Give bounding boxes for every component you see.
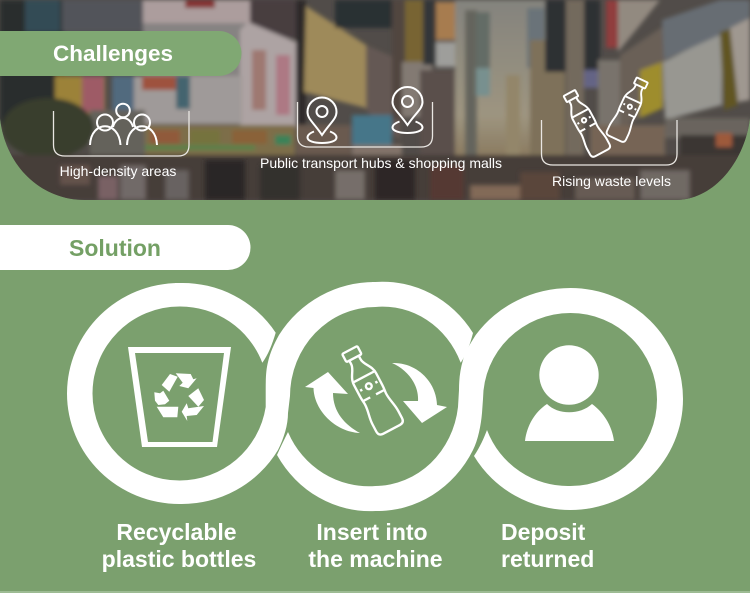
arrow: curved down-right <box>392 363 447 423</box>
icon: bottle with circular arrows <box>305 343 447 436</box>
heading: Solution: Solution <box>69 235 161 261</box>
heading: Challenges: Challenges <box>53 41 173 66</box>
item: rising waste levels <box>542 76 677 189</box>
item: public transport hubs and shopping malls <box>260 87 502 171</box>
label: deposit returned: Deposit <box>501 519 586 545</box>
label: public transport hubs and shopping malls: Public transport hubs & shopping malls <box>260 155 502 171</box>
heading: Solution <box>0 225 250 270</box>
background photo: crowded shopping street <box>0 0 750 200</box>
label: insert into the machine: Insert into <box>316 519 428 545</box>
icon: bottle <box>337 343 404 436</box>
icon: recycling bin <box>128 347 231 447</box>
label: recyclable plastic bottles: Recyclable <box>116 519 237 545</box>
item: high-density areas <box>54 104 189 179</box>
arrow: curved up-left <box>305 372 360 433</box>
icon: two map pins in bracket <box>298 87 432 147</box>
icon: person <box>525 345 614 441</box>
icon: two plastic bottles in bracket <box>542 76 677 165</box>
icon: group of people <box>54 104 189 156</box>
label: high-density areas: High-density areas <box>60 163 176 179</box>
label: insert into the machine: the machine <box>308 546 443 572</box>
interlocking process rings <box>67 282 683 511</box>
label: recyclable plastic bottles: plastic bottles <box>102 546 256 572</box>
heading: Challenges <box>0 31 242 76</box>
label: rising waste levels: Rising waste levels <box>552 173 671 189</box>
label: deposit returned: returned <box>501 546 594 572</box>
